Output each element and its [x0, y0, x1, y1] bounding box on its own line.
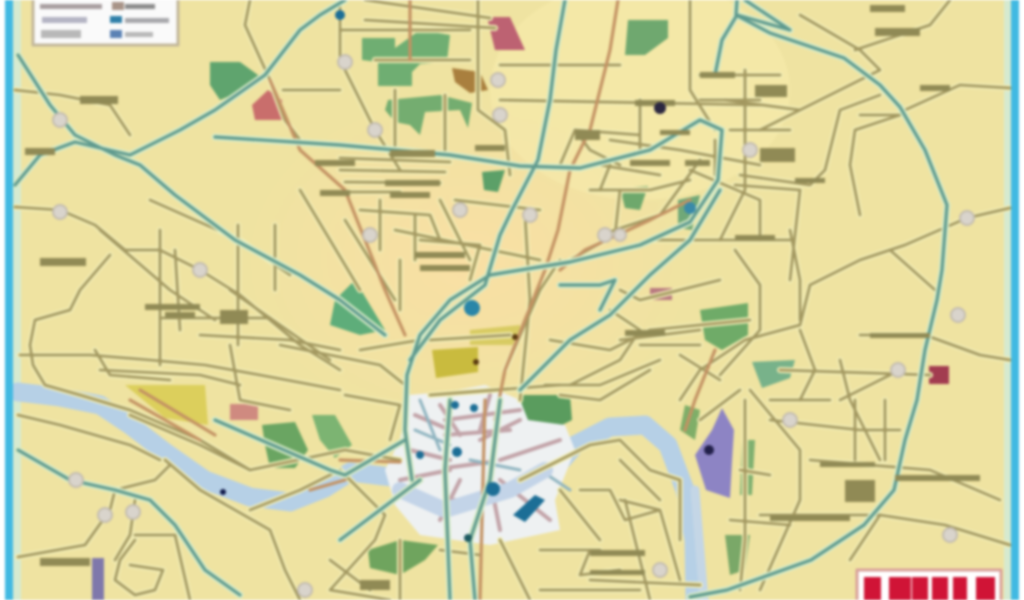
park: east small — [752, 360, 795, 388]
park: central west — [330, 280, 385, 335]
park: center small — [482, 170, 505, 192]
park: near east loop — [678, 195, 700, 230]
park: west river 2 — [312, 415, 352, 458]
landmark: salmon — [230, 404, 258, 420]
park: north west — [210, 62, 262, 100]
landmark: purple south west — [92, 558, 104, 600]
park: southeast — [725, 535, 750, 575]
park: north central lower — [385, 95, 472, 135]
Ohio River — [18, 392, 704, 600]
landmark: yellow centre north — [470, 325, 520, 345]
park: north east — [625, 20, 668, 55]
arterial orange roads — [130, 0, 715, 600]
legend box — [33, 0, 178, 45]
park: center north — [620, 186, 648, 210]
park: north central — [362, 30, 450, 86]
park: south — [368, 540, 438, 575]
landmark: yellow centre — [432, 347, 478, 378]
park: east large — [700, 303, 748, 350]
location markers — [220, 10, 714, 542]
park: west river 1 — [262, 422, 308, 468]
downtown white core — [385, 385, 575, 545]
landmark: dark red east — [929, 366, 949, 384]
landmark: brown — [452, 68, 488, 93]
park: airport side — [740, 440, 755, 495]
landmark: airport — [695, 408, 734, 498]
landmark: mauve — [650, 288, 672, 300]
park: riverside east — [520, 395, 572, 432]
landmark: yellow west — [125, 385, 208, 425]
park: river bend — [680, 405, 700, 440]
landmark: red north central — [487, 17, 525, 50]
landmark: red north west — [252, 90, 282, 120]
logo panel — [857, 570, 1001, 600]
